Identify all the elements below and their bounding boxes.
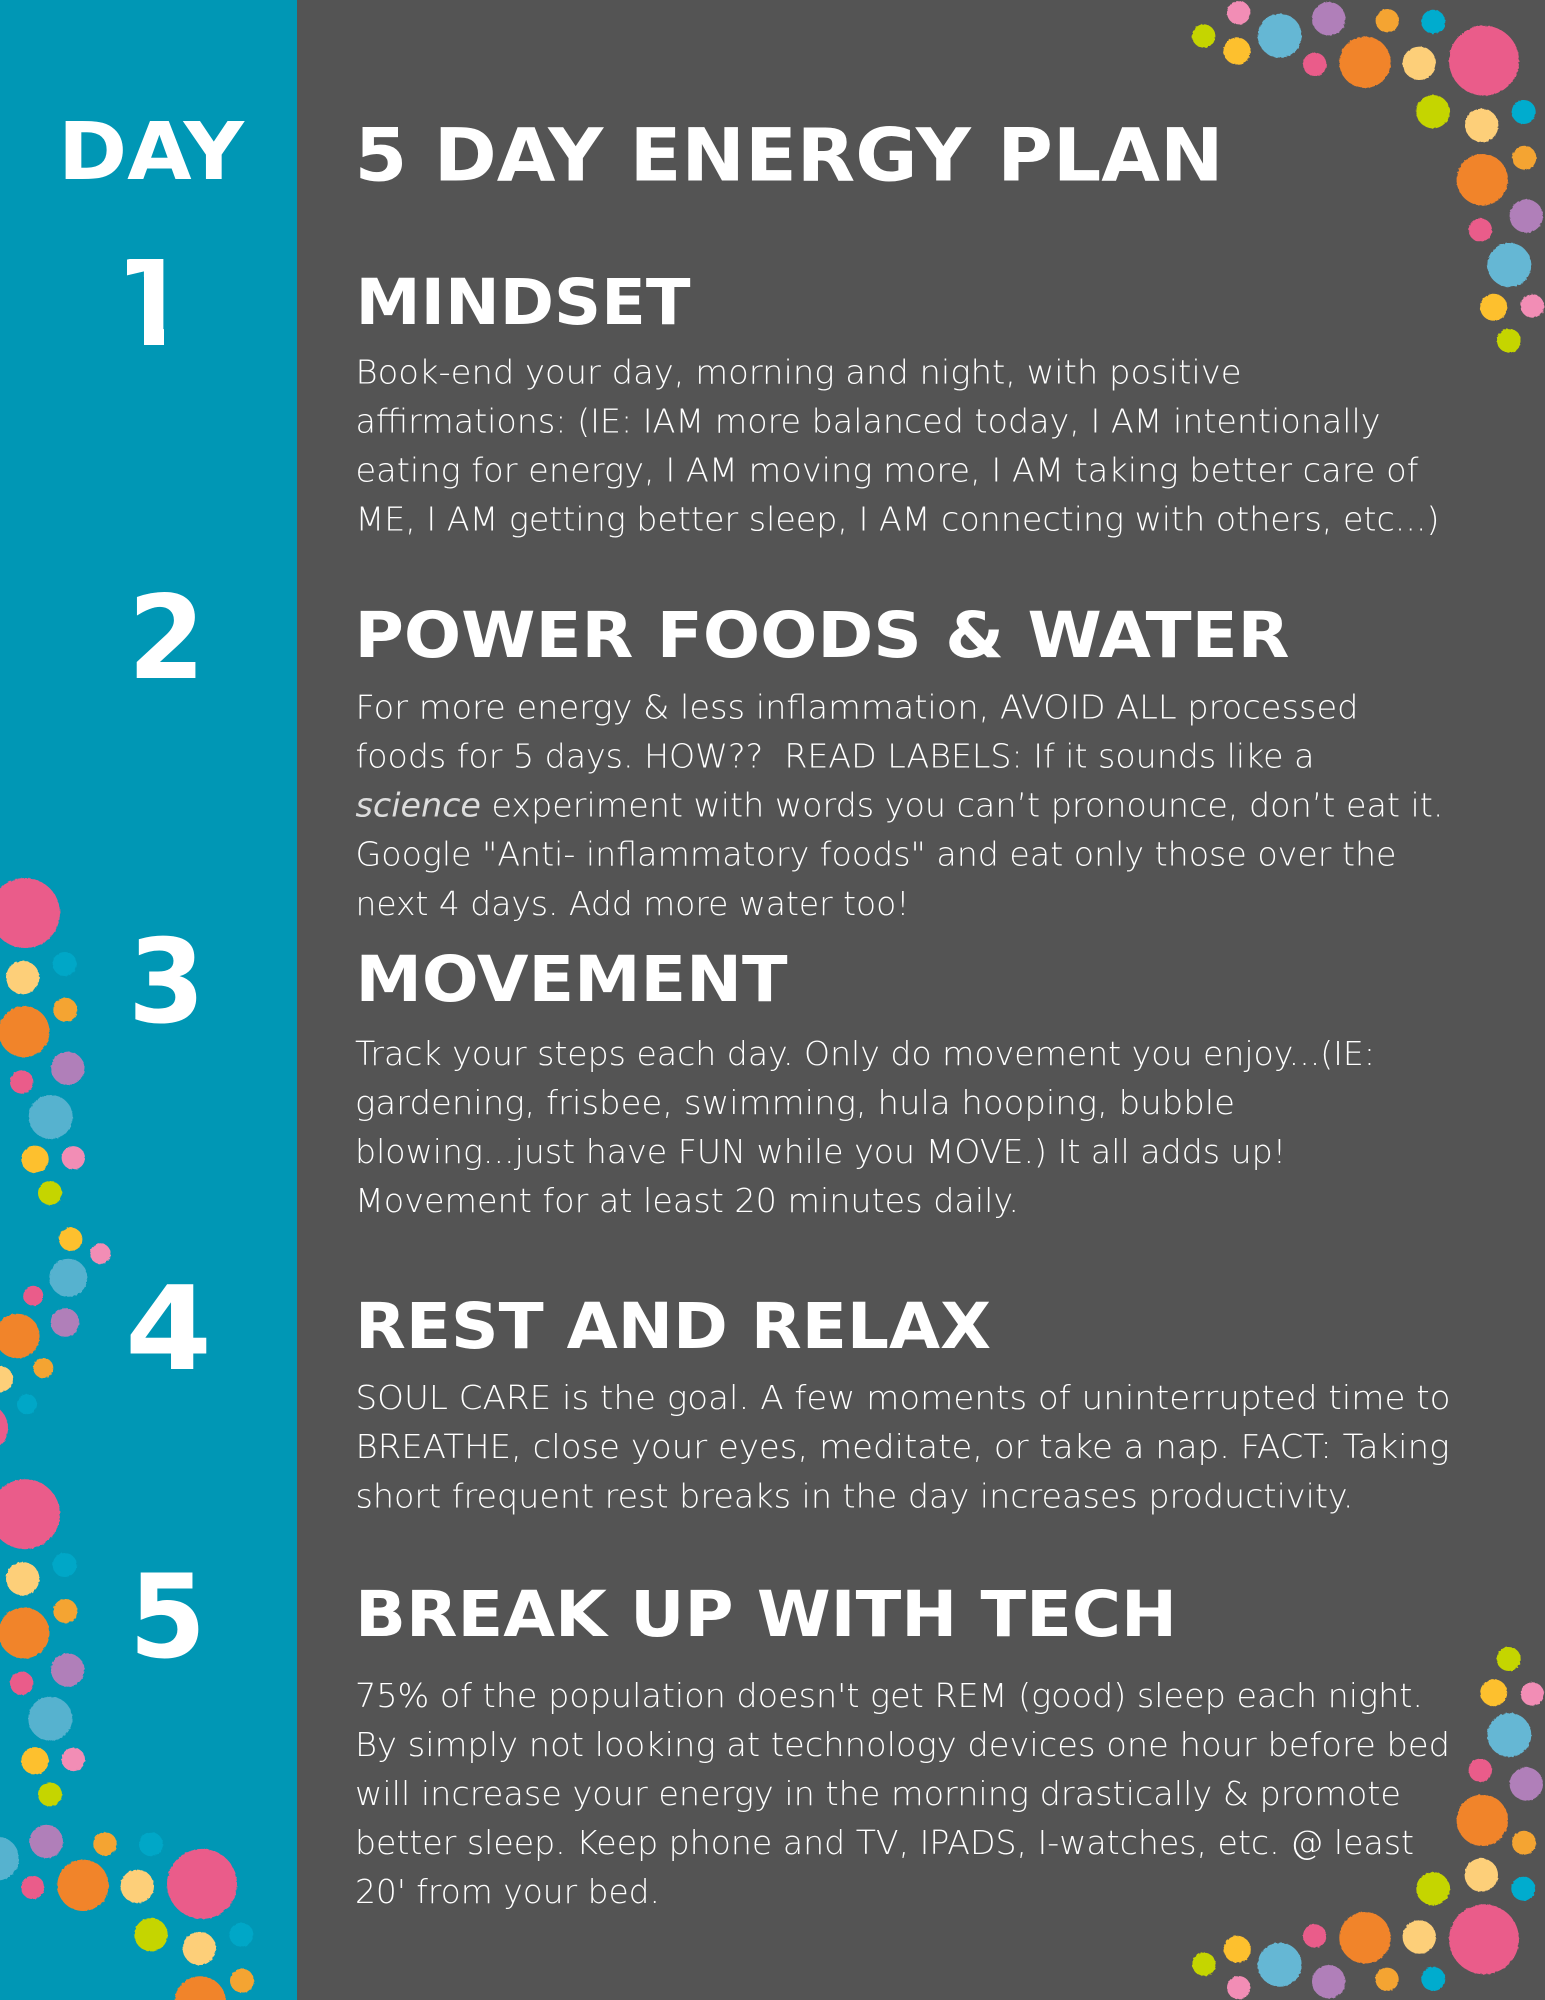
text block: movement body: Movement for at least 20 minutes daily.: [355, 1181, 1019, 1220]
text block: mindset body: Book-end your day, morning and night, with positive: [356, 352, 1242, 392]
heading: rest and relax: REST AND RELAX: [355, 1290, 991, 1363]
text block: rest body: BREATHE, close your eyes, meditate, or take a nap. FACT: Taking: [356, 1427, 1450, 1466]
day number 2: 2: [128, 571, 205, 706]
text block: tech body: better sleep. Keep phone and TV, IPADS, I-watches, etc. @ least: [355, 1823, 1414, 1862]
text block: power foods body: [356, 688, 1444, 923]
text block: movement body: Track your steps each day. Only do movement you enjoy...(IE:: [355, 1034, 1375, 1073]
title: 5 DAY ENERGY PLAN: [354, 114, 1224, 198]
text block: tech body: 75% of the population doesn't get REM (good) sleep each night.: [355, 1676, 1423, 1715]
text block: power foods body: science experiment with words you can’t pronounce, don’t eat it.: [356, 786, 1444, 824]
text block: rest body: SOUL CARE is the goal. A few moments of uninterrupted time to: [356, 1378, 1450, 1417]
section: break up with tech: [355, 1578, 1450, 1911]
section: rest and relax: [355, 1290, 1450, 1516]
day number 1: 1: [113, 232, 189, 374]
panel: teal day sidebar: [0, 0, 297, 2000]
day number 5: 5: [129, 1550, 206, 1685]
text block: rest body: [356, 1378, 1450, 1516]
text block: mindset body: [356, 352, 1440, 538]
text block: tech body: By simply not looking at technology devices one hour before bed: [355, 1725, 1450, 1764]
text block: mindset body: eating for energy, I AM moving more, I AM taking better care of: [356, 450, 1419, 490]
text block: mindset body: ME, I AM getting better sleep, I AM connecting with others, etc...): [356, 500, 1440, 538]
heading: break up with tech: BREAK UP WITH TECH: [355, 1578, 1177, 1651]
text block: rest body: short frequent rest breaks in the day increases productivity.: [356, 1476, 1354, 1516]
decoration: sidebar dots near day 5: [0, 1479, 85, 1806]
text block: tech body: 20' from your bed.: [355, 1872, 660, 1911]
text block: power foods body: For more energy & less inflammation, AVOID ALL processed: [356, 688, 1358, 726]
text block: movement body: blowing...just have FUN while you MOVE.) It all adds up!: [355, 1132, 1286, 1171]
heading: movement: MOVEMENT: [356, 943, 788, 1016]
text block: movement body: [355, 1034, 1375, 1220]
day number 3: 3: [128, 915, 205, 1050]
text block: tech body: [355, 1676, 1450, 1911]
section: power foods and water: [354, 599, 1444, 923]
heading: mindset: MINDSET: [356, 266, 691, 339]
decoration: sidebar bottom dots: [0, 1825, 254, 2000]
section: mindset: [356, 266, 1440, 538]
day number 4: 4: [125, 1262, 212, 1397]
text block: power foods body: next 4 days. Add more water too!: [356, 884, 910, 923]
decoration: sidebar dots near day 3: [0, 878, 85, 1205]
heading: DAY: DAY: [58, 106, 245, 198]
decoration: bottom right dots: [1192, 1647, 1544, 1999]
section: movement: [355, 943, 1375, 1220]
text block: tech body: will increase your energy in the morning drastically & promote: [355, 1774, 1401, 1813]
heading: power foods and water: POWER FOODS & WATER: [354, 599, 1290, 672]
decoration: sidebar dots near day 4: [0, 1228, 111, 1453]
text block: movement body: gardening, frisbee, swimming, hula hooping, bubble: [355, 1083, 1235, 1122]
text block: power foods body: Google "Anti- inflammatory foods" and eat only those over the: [356, 834, 1396, 874]
text block: power foods body: foods for 5 days. HOW?? READ LABELS: If it sounds like a: [356, 736, 1314, 776]
text block: mindset body: affirmations: (IE: IAM more balanced today, I AM intentionally: [356, 402, 1380, 440]
decoration: top right dots: [1192, 1, 1544, 353]
